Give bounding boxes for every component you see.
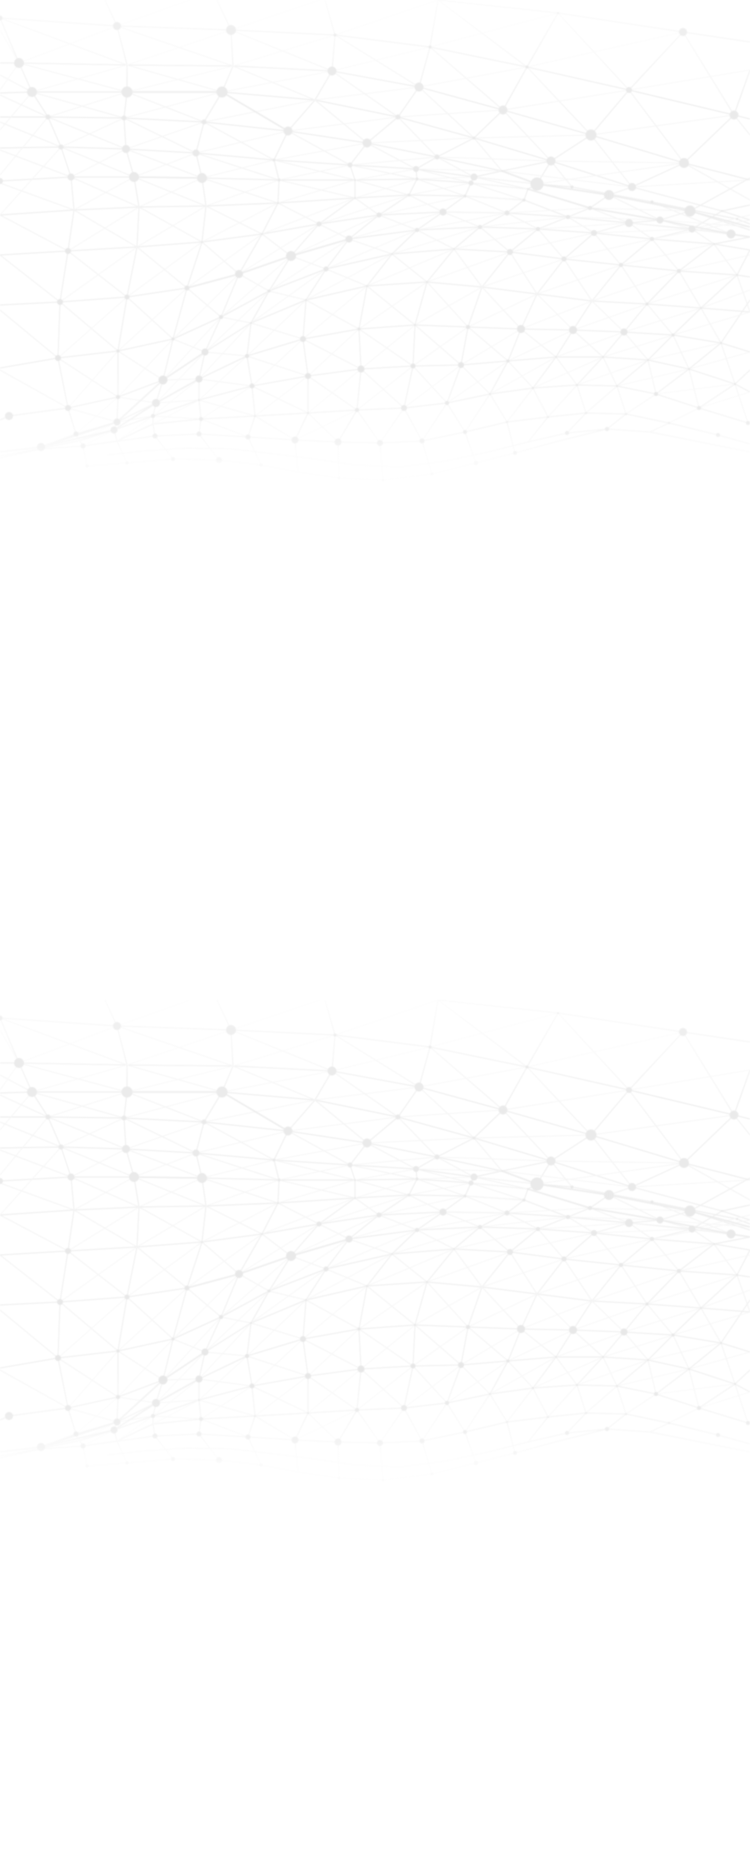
mesh descending diagonals bbox=[0, 0, 750, 443]
mesh nodes bbox=[0, 13, 748, 480]
mesh tile: top network bbox=[0, 0, 750, 480]
mesh emphasised ridges bbox=[0, 92, 750, 452]
mesh horizontal lines bbox=[0, 0, 750, 480]
mesh ascending diagonals bbox=[0, 0, 750, 446]
mesh tile: lower repeat bbox=[0, 1000, 750, 1480]
mesh vertical lines bbox=[0, 0, 750, 480]
